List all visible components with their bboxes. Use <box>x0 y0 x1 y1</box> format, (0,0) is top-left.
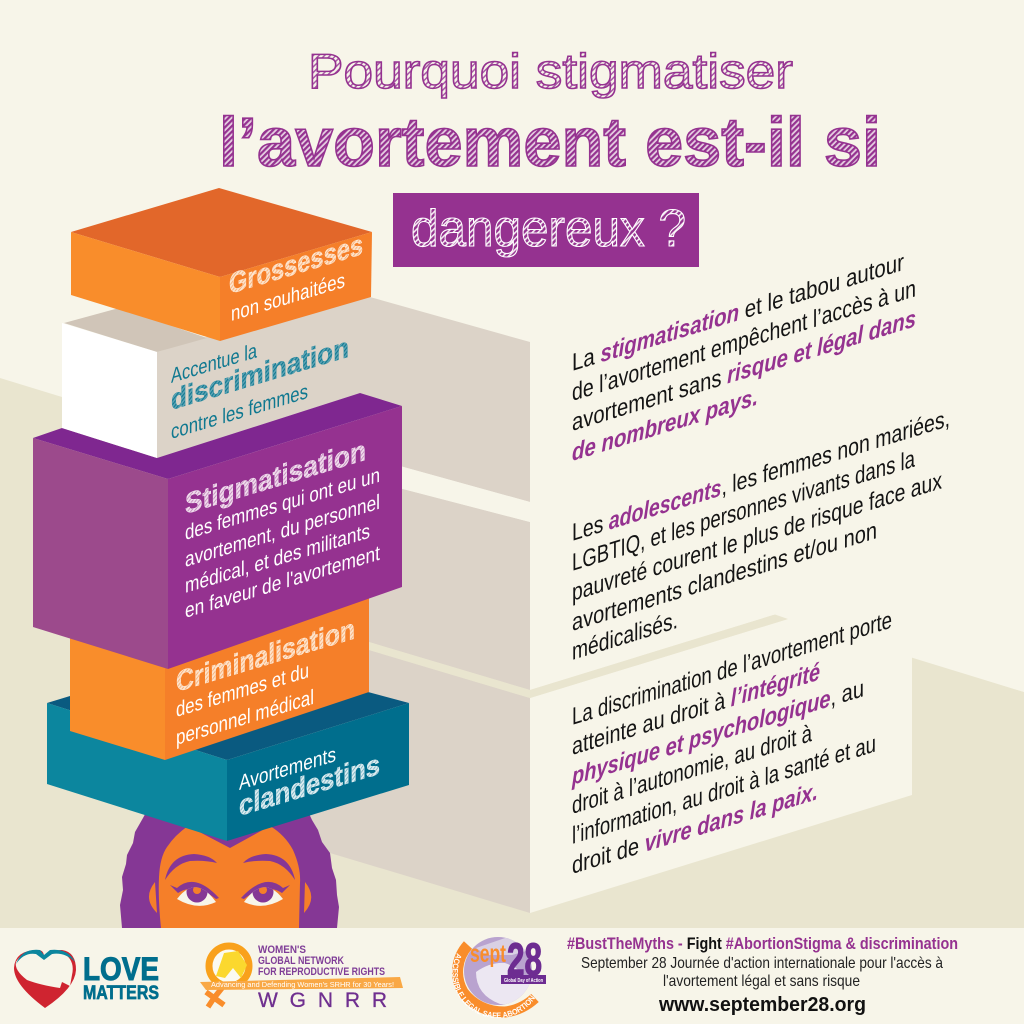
sept: sept <box>470 940 506 968</box>
block: Criminalisation <box>70 590 369 760</box>
hashtags: #BustTheMyths - Fight #AbortionStigma & discrimination <box>567 935 958 953</box>
title line 3: dangereux ? <box>411 200 686 258</box>
label heading: Stigmatisation <box>185 434 366 521</box>
text block 1: La stigmatisation et le tabou autour <box>572 248 904 377</box>
globe map <box>216 951 247 978</box>
name: FOR REPRODUCTIVE RIGHTS <box>258 966 385 978</box>
text block 2: avortements clandestins et/ou non <box>572 516 877 637</box>
iris right <box>252 887 274 902</box>
title line 2: l’avortement est-il si <box>219 103 881 181</box>
orange band <box>458 945 535 1012</box>
text block 3: l’information, au droit à la santé et au <box>572 730 876 850</box>
iris left <box>186 887 208 902</box>
hair <box>120 805 339 928</box>
shadow wall: middle <box>369 480 530 690</box>
continents <box>476 937 530 1005</box>
label line: médical, et des militants <box>185 519 370 598</box>
text block 2: LGBTIQ, et les personnes vivants dans la <box>572 445 915 577</box>
text panel backdrop: upper panels <box>530 300 1024 692</box>
ears <box>149 882 311 913</box>
label line: avortement, du personnel <box>185 490 380 572</box>
text block 2 <box>572 404 950 666</box>
text block 3 <box>571 606 892 880</box>
block: Avortements clandestins <box>47 692 409 841</box>
day of action tag <box>501 975 546 984</box>
ribbon text: Advancing and Defending Women's SRHR for 30 Years! <box>211 980 394 989</box>
stripe between panels <box>369 614 788 698</box>
label heading: Criminalisation <box>176 613 355 699</box>
woman's head <box>120 805 339 928</box>
description line 2: l'avortement légal et sans risque <box>663 973 860 990</box>
name: GLOBAL NETWORK <box>258 955 344 967</box>
label heading: Grossesses <box>229 228 363 301</box>
label emphasis: clandestins <box>239 748 380 823</box>
cross <box>206 988 224 1007</box>
text block 3: droit de vivre dans la paix. <box>572 777 818 880</box>
block: Stigmatisation <box>33 393 402 669</box>
logo: WGNRR <box>200 944 403 1012</box>
logo: Love Matters <box>14 950 159 1008</box>
globe <box>464 937 532 1005</box>
text block 2: médicalisés. <box>572 606 678 666</box>
label line: contre les femmes <box>171 379 308 444</box>
text block 3: La discrimination de l’avortement porte <box>572 606 892 731</box>
eyes <box>177 887 283 906</box>
wordmark line 2: MATTERS <box>83 982 159 1004</box>
wordmark: LOVE <box>83 951 159 987</box>
heart <box>14 950 76 1008</box>
acronym: WGNRR <box>258 989 387 1012</box>
label: Avortements <box>239 742 336 795</box>
footer text <box>567 935 958 1016</box>
cream gap between the upper shadow walls <box>360 455 530 522</box>
text block 2: Les adolescents, les femmes non mariées, <box>572 404 950 547</box>
text block 1: avortement sans risque et légal dans <box>572 305 916 437</box>
label line: non souhaitées <box>231 268 345 326</box>
logo: September 28 <box>452 934 546 1018</box>
eyelids <box>170 882 290 899</box>
shadow wall: bottom <box>310 650 530 913</box>
eyebrows <box>165 854 295 880</box>
tag text: Global Day of Action <box>504 978 543 984</box>
ground plane <box>0 378 1024 928</box>
text block 3: droit à l’autonomie, au droit à <box>572 719 812 820</box>
label line: personnel médical <box>176 685 314 750</box>
block: Grossesses non souhaitées <box>71 188 372 341</box>
title <box>219 45 881 181</box>
text block 1 <box>572 248 916 467</box>
text block 3: atteinte au droit à l’intégrité <box>572 658 820 761</box>
label line: Accentue la <box>171 339 257 388</box>
text block 3: physique et psychologique, au <box>571 674 864 791</box>
label line: des femmes et du <box>176 659 309 722</box>
title box <box>393 193 699 267</box>
shadow wall: top <box>157 297 530 502</box>
face <box>159 826 300 928</box>
label line: des femmes qui ont eu un <box>185 463 380 545</box>
label emphasis: discrimination <box>171 331 349 417</box>
globe ring <box>209 946 249 986</box>
ribbon <box>200 977 403 990</box>
description line 1: September 28 Journée d'action internationale pour l'accès à <box>581 955 943 972</box>
28: 28 <box>507 934 542 985</box>
label line: en faveur de l'avortement <box>185 541 380 623</box>
url: www.september28.org <box>658 994 866 1016</box>
text block 1: de l’avortement empêchent l’accès à un <box>572 275 916 407</box>
block: Accentue la discrimination <box>62 308 349 458</box>
text block 1: de nombreux pays. <box>572 383 758 467</box>
band text: ACCESSIBLE LEGAL SAFE ABORTION <box>452 953 535 1018</box>
name: WOMEN'S <box>258 944 306 956</box>
title line 1: Pourquoi stigmatiser <box>308 45 793 99</box>
text panel: bottom <box>530 619 912 913</box>
